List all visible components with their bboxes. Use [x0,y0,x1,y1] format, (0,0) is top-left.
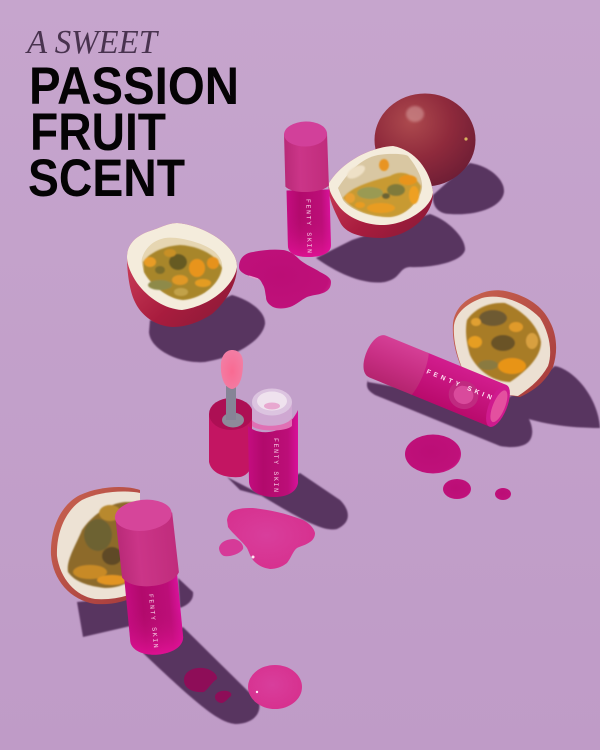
bottle cap [284,132,329,193]
bottle body [124,572,185,657]
small droplet [219,539,243,556]
applicator tip [221,350,243,389]
fruit emblem [444,376,483,414]
halved passion fruit, left [127,223,237,327]
lying bottle [358,331,515,430]
wand stem [226,386,236,420]
shadows of products and fruit [77,163,600,724]
puddle, centre [219,508,315,569]
bottle body [287,189,331,258]
halved passion fruit, bottom left [51,487,140,604]
open bottle [248,388,298,497]
bottle cap [358,331,432,396]
title: main heading [28,57,239,208]
bottle body [410,352,507,427]
title: main heading: PASSION [29,57,239,116]
brand label: FENTY SKIN [425,368,493,402]
halved passion fruit, top right [329,146,433,238]
drops, right [405,434,511,500]
upright bottle, top centre [284,121,331,258]
halved passion fruit, right [453,290,556,397]
title: main heading: SCENT [28,149,185,208]
drops on shadow, bottom [184,668,231,703]
applicator in open cap [209,350,253,477]
large drop, bottom [248,665,302,709]
brand label: FENTY SKIN [272,438,279,492]
upright bottle, bottom left [113,497,187,657]
glint [252,556,254,558]
open end [481,382,515,430]
brand label: FENTY SKIN [304,199,313,253]
title [25,24,239,208]
wand collar [222,412,244,428]
bottle cap [115,512,180,589]
brand label: FENTY SKIN [147,594,159,648]
title: main heading: FRUIT [30,103,166,162]
whole passion fruit [374,94,476,186]
glass neck [252,402,292,429]
inverted cap [209,414,252,477]
puddle, top centre [239,250,331,308]
bottle body [248,410,298,497]
title: script line: A SWEET [25,24,159,61]
